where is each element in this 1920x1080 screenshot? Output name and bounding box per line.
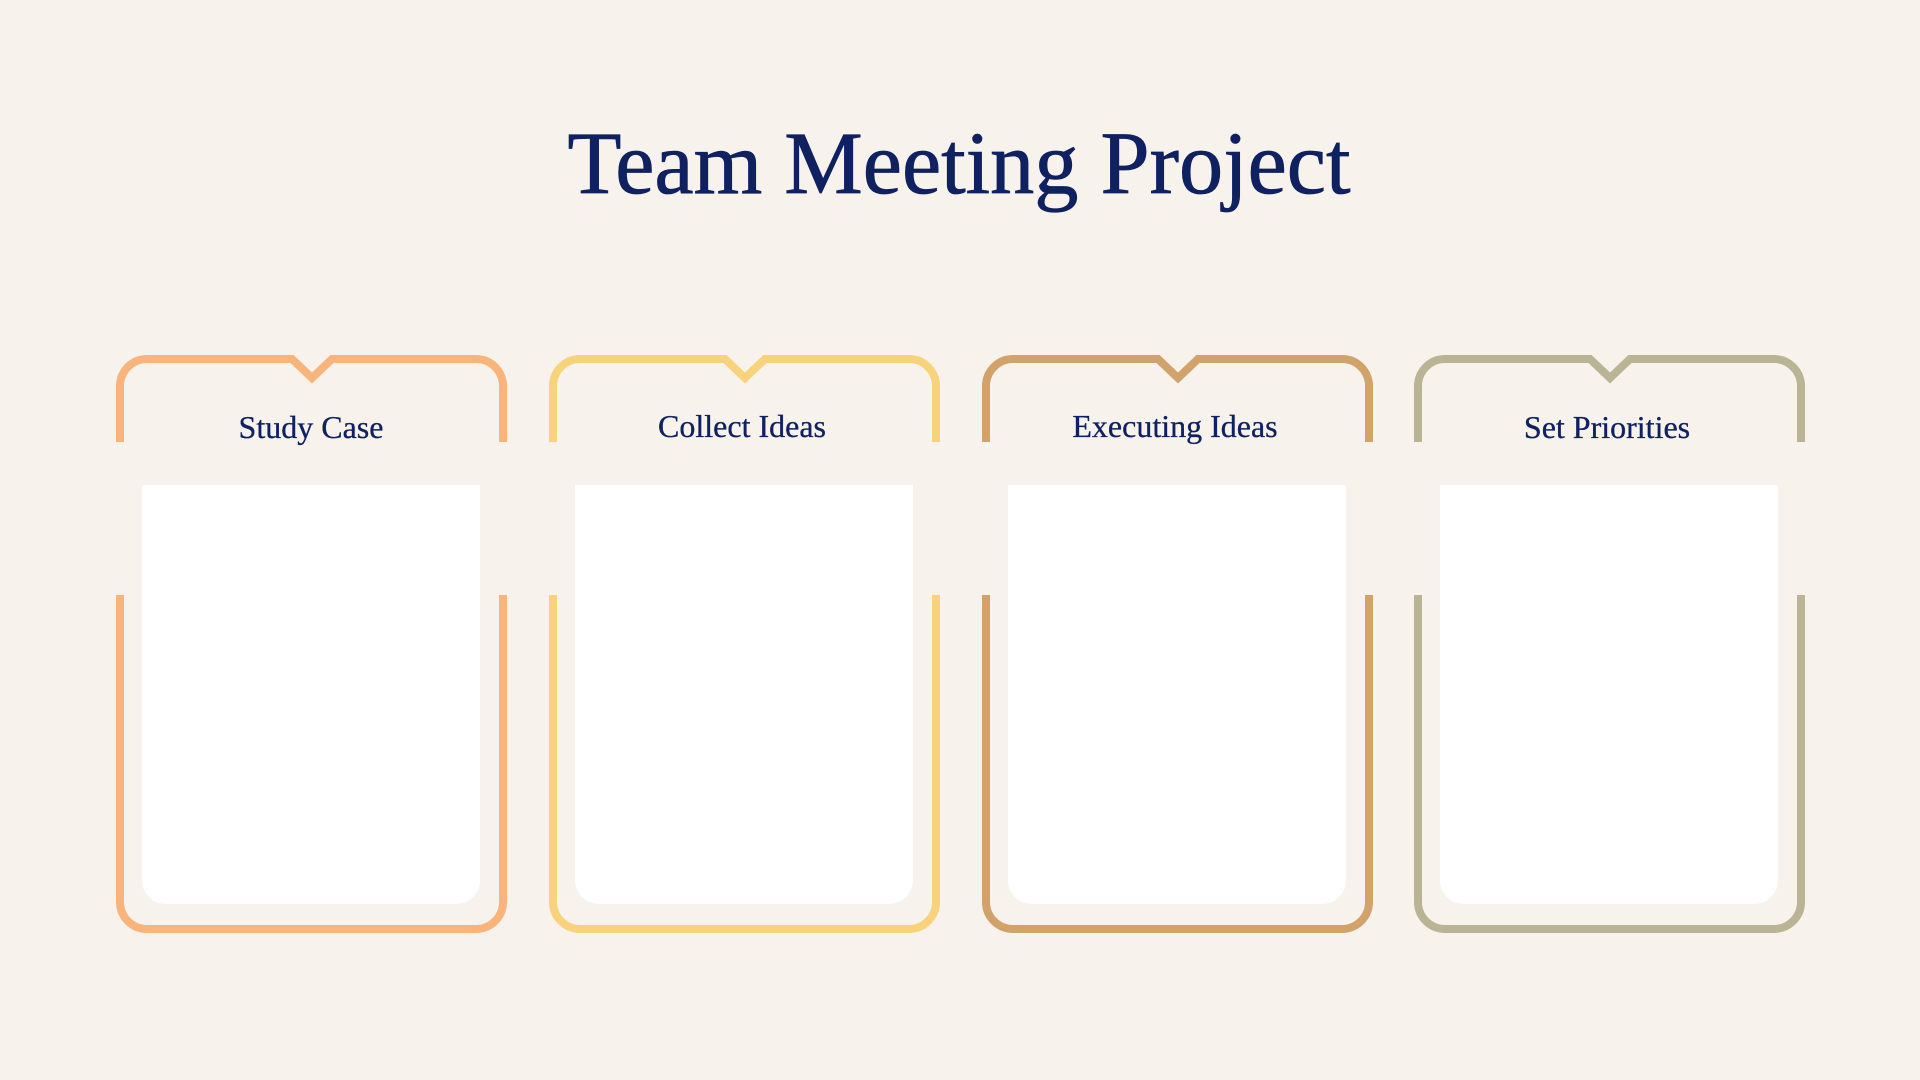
white content panel (1440, 485, 1778, 904)
panel: Set Priorities (1418, 359, 1801, 929)
outline (553, 359, 936, 929)
title: Team Meeting Project (568, 115, 1351, 213)
heading: Study Case (239, 409, 383, 445)
heading: Collect Ideas (658, 408, 826, 444)
outline (120, 359, 503, 929)
white content panel (1008, 485, 1346, 904)
white content panel (142, 485, 480, 904)
outline (986, 359, 1369, 929)
heading: Executing Ideas (1072, 408, 1278, 444)
panel: Study Case (120, 359, 503, 929)
white content panel (575, 485, 913, 904)
panel: Executing Ideas (986, 359, 1369, 929)
outline (1418, 359, 1801, 929)
heading: Set Priorities (1524, 409, 1690, 445)
panel: Collect Ideas (553, 359, 936, 929)
